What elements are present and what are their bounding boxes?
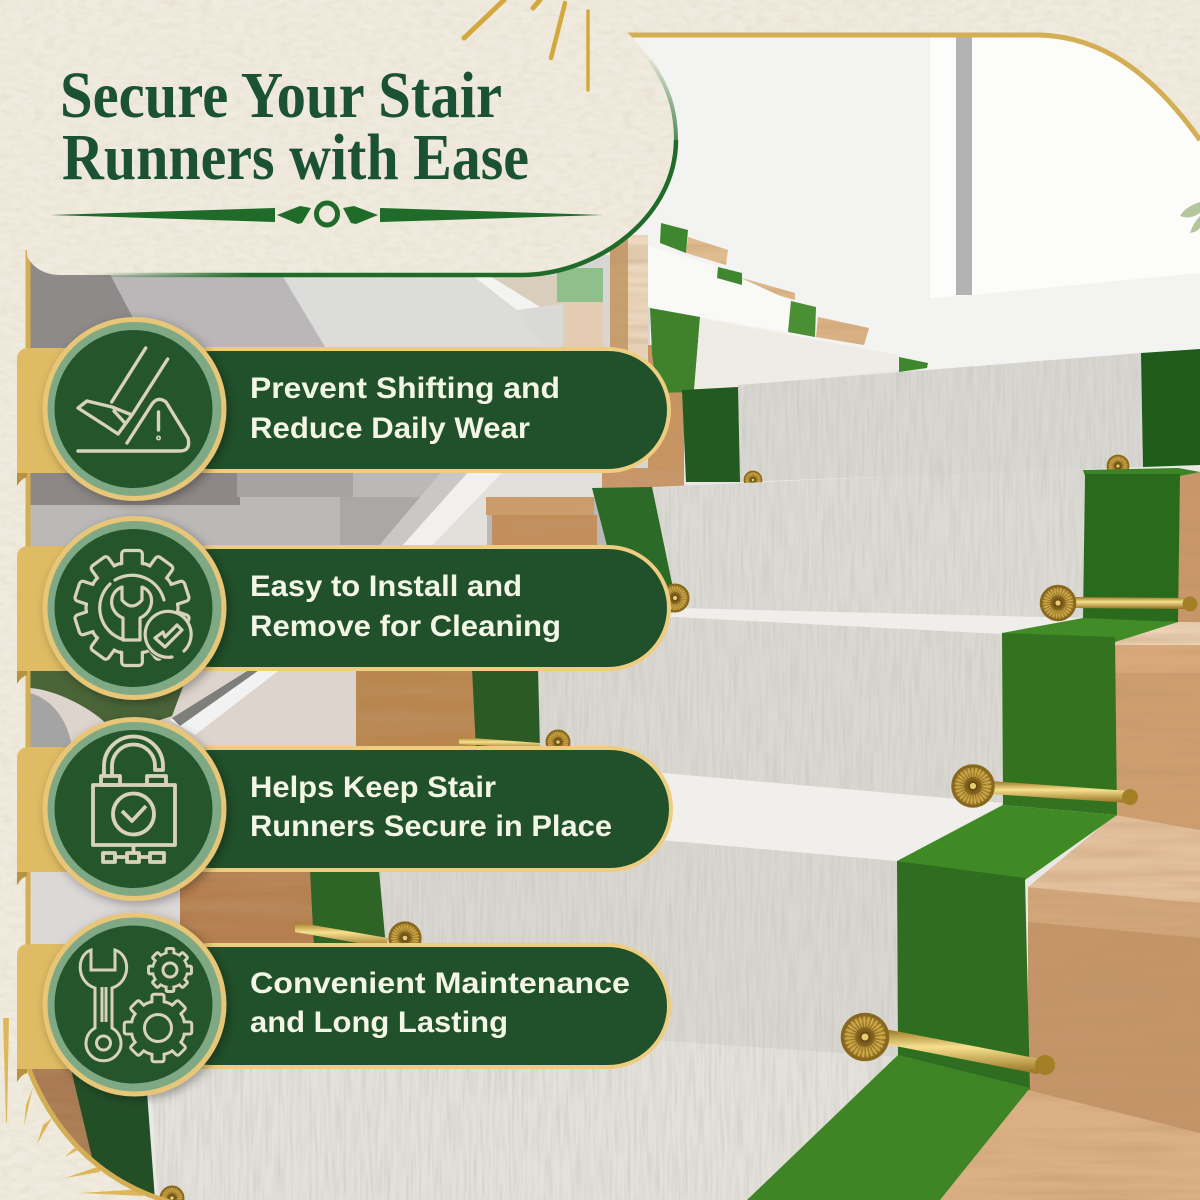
wood structure behind runner	[30, 235, 1200, 1200]
title heading: Runners with Ease	[62, 121, 529, 194]
top visible riser and stair green	[682, 349, 1200, 489]
text: convenient maintenance: Convenient Maintenance	[250, 967, 630, 1000]
green text pill	[150, 945, 669, 1067]
gold ribbon tab	[17, 944, 210, 1082]
text: easy to install: Easy to Install and	[250, 570, 522, 603]
badge icon: gear with wrench and check	[42, 516, 226, 700]
carpet risers	[380, 469, 1085, 1057]
ornamental divider	[50, 203, 603, 225]
gold ribbon tab	[17, 546, 210, 684]
green text pill	[150, 547, 669, 669]
text: prevent shifting: Prevent Shifting and	[250, 372, 560, 405]
green text pill	[150, 349, 669, 471]
benefit row 4	[17, 912, 669, 1096]
decorative gold rays top	[464, 0, 588, 90]
title panel	[27, 32, 678, 278]
left side wall and glass balustrade	[30, 255, 670, 1000]
badge icon: padlock with check	[42, 717, 226, 901]
upper stair runner	[648, 223, 928, 393]
benefit row 3	[17, 717, 671, 901]
green border of runner	[70, 468, 1200, 1200]
badge icon: shoe on slipping runner with warning	[42, 317, 226, 501]
text: prevent shifting: Reduce Daily Wear	[250, 412, 530, 445]
text: convenient maintenance: and Long Lasting	[250, 1006, 508, 1039]
title heading: Secure Your Stair	[60, 59, 501, 132]
green text pill	[150, 748, 671, 870]
window and wall	[600, 30, 1200, 370]
benefit row 2	[17, 516, 669, 700]
text: easy to install: Remove for Cleaning	[250, 610, 561, 643]
benefit row 1	[17, 317, 669, 501]
decorative gold rays bottom left	[3, 1018, 143, 1196]
text: helps keep: Helps Keep Stair	[250, 771, 496, 804]
text: helps keep: Runners Secure in Place	[250, 810, 612, 843]
badge icon: wrench and gears	[42, 912, 226, 1096]
gold ribbon tab	[17, 747, 210, 885]
brass stair rods and rosette knobs	[160, 584, 1198, 1200]
gold ribbon tab	[17, 348, 210, 486]
carpet treads	[147, 608, 1083, 1200]
